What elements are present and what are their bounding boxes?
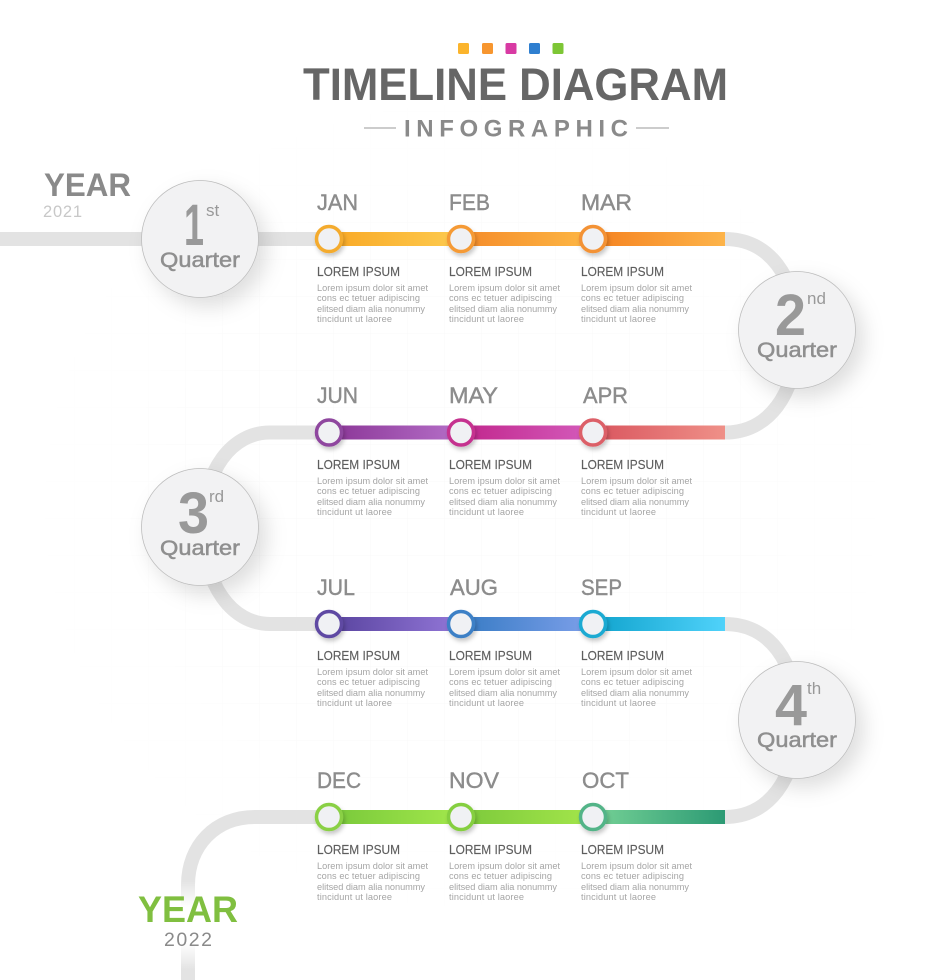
text: Nov: elitsed diam alia nonummy (449, 882, 557, 892)
text: Sep: LOREM IPSUM (581, 649, 664, 663)
node: Sep (580, 612, 606, 636)
quarter badge 1: Quarter (160, 249, 240, 272)
node: Jan (316, 226, 342, 252)
text: Jan: LOREM IPSUM (317, 265, 400, 279)
text: Jan: JAN (317, 190, 358, 215)
text: Feb: LOREM IPSUM (449, 265, 532, 279)
text: Nov: Lorem ipsum dolor sit amet (449, 861, 560, 871)
text: Dec: cons ec tetuer adipiscing (317, 871, 420, 881)
year 2022 label: 2022 (164, 929, 212, 951)
node: Feb (448, 226, 474, 252)
year 2021 label: YEAR (44, 167, 131, 203)
quarter badge 2 (738, 272, 856, 388)
text: Feb: cons ec tetuer adipiscing (449, 293, 552, 303)
row 1: January to March (316, 190, 725, 324)
text: Aug: Lorem ipsum dolor sit amet (449, 667, 560, 677)
text: May: MAY (449, 383, 498, 408)
row 3: July to September (316, 575, 725, 708)
decorative colour squares (458, 43, 564, 54)
text: Jun: tincidunt ut laoree (317, 507, 392, 517)
text: Nov: NOV (449, 768, 499, 793)
node: Jun (316, 420, 342, 445)
text: Aug: tincidunt ut laoree (449, 698, 524, 708)
quarter badge 2: Quarter (757, 339, 837, 362)
text: Jan: cons ec tetuer adipiscing (317, 293, 420, 303)
text: Sep: SEP (581, 575, 622, 600)
text: Feb: FEB (449, 190, 490, 215)
text: Jun (317, 383, 428, 517)
text: Jul (317, 575, 428, 708)
text: Jan: elitsed diam alia nonummy (317, 304, 425, 314)
quarter badge 4 (738, 662, 856, 778)
text: Aug: LOREM IPSUM (449, 649, 532, 663)
node: May (448, 420, 474, 445)
text: Aug: elitsed diam alia nonummy (449, 688, 557, 698)
text: Oct: elitsed diam alia nonummy (581, 882, 689, 892)
text: Dec: DEC (317, 768, 361, 793)
row 2: June to April (316, 383, 725, 517)
text: Feb: tincidunt ut laoree (449, 314, 524, 324)
node: Dec (316, 804, 342, 830)
text: Jul: JUL (317, 575, 355, 600)
node: Aug (448, 612, 474, 636)
text: Jun: JUN (317, 383, 358, 408)
text: Apr: elitsed diam alia nonummy (581, 497, 689, 507)
text: Nov: tincidunt ut laoree (449, 892, 524, 902)
year 2022 label (138, 889, 238, 951)
text: Jan: tincidunt ut laoree (317, 314, 392, 324)
text: Nov (449, 768, 560, 902)
year 2021 label: 2021 (43, 203, 82, 221)
text: Mar: cons ec tetuer adipiscing (581, 293, 684, 303)
text: Feb: Lorem ipsum dolor sit amet (449, 283, 560, 293)
text: Aug (449, 575, 560, 708)
text: Jan (317, 190, 428, 324)
text: Sep: elitsed diam alia nonummy (581, 688, 689, 698)
year 2021 label (43, 167, 131, 221)
text: Feb: elitsed diam alia nonummy (449, 304, 557, 314)
text: Jul: Lorem ipsum dolor sit amet (317, 667, 428, 677)
node: Oct (580, 804, 606, 830)
text: Feb (449, 190, 560, 324)
quarter badge 4: 4 (775, 673, 807, 738)
text: May: LOREM IPSUM (449, 458, 532, 472)
text: Oct: cons ec tetuer adipiscing (581, 871, 684, 881)
text: Apr: APR (583, 383, 628, 408)
text: Jun: LOREM IPSUM (317, 458, 400, 472)
text: Apr (581, 383, 692, 517)
text: Aug: cons ec tetuer adipiscing (449, 677, 552, 687)
bar segments (329, 232, 725, 246)
text: Jan: Lorem ipsum dolor sit amet (317, 283, 428, 293)
quarter badge 1: 1 (184, 193, 204, 258)
text: Dec: Lorem ipsum dolor sit amet (317, 861, 428, 871)
quarter badge 3: Quarter (160, 537, 240, 560)
node: Mar (580, 226, 606, 252)
quarter badge 2: nd (807, 289, 826, 308)
text: Apr: tincidunt ut laoree (581, 507, 656, 517)
text: May: tincidunt ut laoree (449, 507, 524, 517)
text: Jul: elitsed diam alia nonummy (317, 688, 425, 698)
text: Oct: tincidunt ut laoree (581, 892, 656, 902)
quarter badge 4: th (807, 679, 821, 698)
title: TIMELINE DIAGRAM (303, 59, 728, 110)
node: Nov (448, 804, 474, 830)
grey road path (0, 239, 797, 980)
subtitle: INFOGRAPHIC (404, 116, 628, 142)
text: Oct: LOREM IPSUM (581, 843, 664, 857)
text: Dec: LOREM IPSUM (317, 843, 400, 857)
text: Jul: LOREM IPSUM (317, 649, 400, 663)
quarter badge 4: Quarter (757, 729, 837, 752)
node: Jul (316, 612, 342, 636)
text: May: Lorem ipsum dolor sit amet (449, 476, 560, 486)
text: Dec: tincidunt ut laoree (317, 892, 392, 902)
text: Oct: OCT (582, 768, 629, 793)
text: Mar: MAR (581, 190, 632, 215)
text: May (449, 383, 560, 517)
text: Mar: elitsed diam alia nonummy (581, 304, 689, 314)
text: Jun: elitsed diam alia nonummy (317, 497, 425, 507)
quarter badge 3 (142, 468, 258, 586)
text: Apr: Lorem ipsum dolor sit amet (581, 476, 692, 486)
bar segments (329, 426, 725, 440)
bar segments (329, 617, 725, 631)
quarter badge 3: rd (209, 487, 224, 506)
text: Mar (581, 190, 692, 324)
text: Jun: Lorem ipsum dolor sit amet (317, 476, 428, 486)
text: Jul: tincidunt ut laoree (317, 698, 392, 708)
text: Dec (317, 768, 428, 902)
bar segments (329, 810, 725, 824)
text: Sep (581, 575, 692, 708)
text: May: cons ec tetuer adipiscing (449, 486, 552, 496)
quarter badge 2: 2 (775, 283, 806, 348)
text: Oct: Lorem ipsum dolor sit amet (581, 861, 692, 871)
node: Apr (580, 420, 606, 445)
quarter badge 3: 3 (178, 481, 209, 546)
text: Oct (581, 768, 692, 902)
quarter badge 1 (142, 180, 258, 298)
text: Sep: Lorem ipsum dolor sit amet (581, 667, 692, 677)
text: Apr: cons ec tetuer adipiscing (581, 486, 684, 496)
text: Jun: cons ec tetuer adipiscing (317, 486, 420, 496)
quarter badge 1: st (206, 201, 220, 220)
text: Nov: LOREM IPSUM (449, 843, 532, 857)
text: Mar: tincidunt ut laoree (581, 314, 656, 324)
text: Aug: AUG (450, 575, 498, 600)
text: Jul: cons ec tetuer adipiscing (317, 677, 420, 687)
text: Dec: elitsed diam alia nonummy (317, 882, 425, 892)
text: Nov: cons ec tetuer adipiscing (449, 871, 552, 881)
text: May: elitsed diam alia nonummy (449, 497, 557, 507)
text: Mar: LOREM IPSUM (581, 265, 664, 279)
text: Apr: LOREM IPSUM (581, 458, 664, 472)
row 4: December to October (316, 768, 725, 902)
year 2022 label: YEAR (138, 889, 238, 930)
text: Mar: Lorem ipsum dolor sit amet (581, 283, 692, 293)
text: Sep: tincidunt ut laoree (581, 698, 656, 708)
text: Sep: cons ec tetuer adipiscing (581, 677, 684, 687)
